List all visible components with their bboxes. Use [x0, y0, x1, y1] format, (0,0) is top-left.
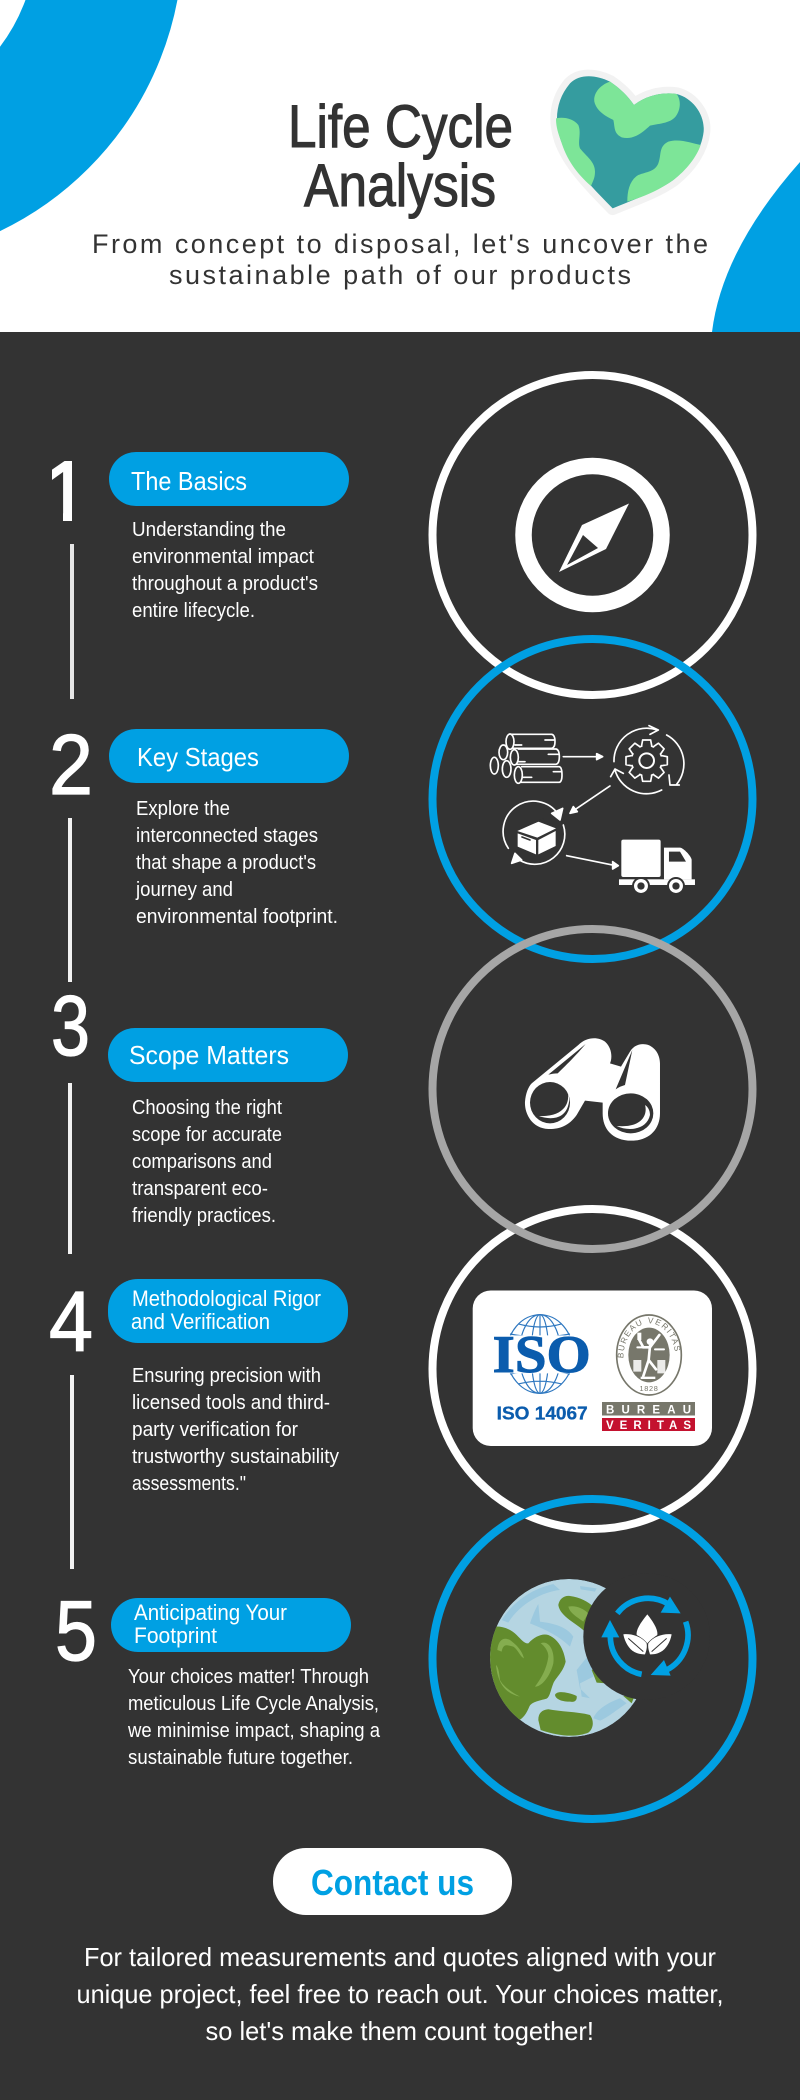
logo: Bureau Veritas: BUREAU [606, 1404, 691, 1416]
ring 1 [432, 375, 752, 695]
subtitle [92, 229, 708, 290]
text: step 3 description: friendly practices. [132, 1205, 276, 1227]
step 2 text group [49, 718, 349, 982]
icon: earth with recycling symbol [490, 1579, 691, 1737]
logo: ISO [493, 1315, 591, 1424]
subtitle: From concept to disposal, let's uncover the [92, 229, 708, 259]
text: step 2 description: Explore the [136, 798, 230, 820]
header panel [0, 0, 800, 332]
pill: Anticipating Your Footprint: Footprint [134, 1623, 217, 1648]
text: step 4 description: licensed tools and third- [132, 1392, 330, 1414]
decorative blue arc top left [0, 0, 110, 190]
pill: Key Stages: Key Stages [137, 742, 259, 772]
number 5: 5 [55, 1584, 97, 1679]
text: step 3 description: comparisons and [132, 1151, 272, 1173]
text: step 3 description: Choosing the right [132, 1097, 282, 1119]
text: step 2 description: that shape a product's [136, 852, 316, 874]
subtitle: sustainable path of our products [169, 260, 631, 290]
title: Life Cycle [288, 93, 513, 160]
pill: The Basics [109, 452, 349, 506]
text: step 2 description: journey and [135, 879, 233, 901]
arrow: logs to manufacturing [563, 754, 603, 760]
icon: recycling arrows [601, 1597, 688, 1676]
text: step 5 description: meticulous Life Cycle Analysis, [128, 1693, 379, 1715]
icon: logs [490, 734, 562, 783]
text: step 2 description: environmental footprint. [136, 906, 338, 928]
text: step 1 description: Understanding the [132, 519, 286, 541]
number 1: 1 [43, 445, 90, 540]
text: step 3 description: scope for accurate [132, 1124, 282, 1146]
closing text: unique project, feel free to reach out. Your choices matter, [76, 1979, 724, 2009]
text: step 3 description [132, 1097, 282, 1227]
text: step 2 description: interconnected stages [136, 825, 318, 847]
text: step 5 description: Your choices matter! Through [128, 1666, 369, 1688]
number 2: 2 [49, 718, 93, 813]
title [288, 93, 513, 219]
number 4: 4 [49, 1275, 93, 1370]
icon: binoculars [525, 1038, 660, 1141]
icon: truck [619, 840, 695, 895]
button: Contact us: Contact us [311, 1862, 474, 1903]
button: Contact us [273, 1848, 512, 1915]
text: step 5 description: we minimise impact, shaping a [127, 1720, 381, 1742]
pill: Methodological Rigor and Verification: and Verification [131, 1309, 270, 1334]
ring 2 [432, 639, 752, 959]
logo: Bureau Veritas: 1828 [640, 1384, 658, 1393]
ring 3 [432, 929, 752, 1249]
ring 5 [432, 1499, 752, 1819]
pill: Scope Matters: Scope Matters [129, 1040, 289, 1070]
pill: Methodological Rigor and Verification [108, 1279, 348, 1343]
title: Analysis [304, 152, 496, 219]
icon: leaves [623, 1614, 672, 1654]
ring 4 [432, 1209, 752, 1529]
logo: ISO: ISO [493, 1326, 591, 1384]
step 1 text group [43, 445, 349, 699]
connector line 1 [70, 544, 74, 699]
number 3: 3 [51, 979, 90, 1074]
pill: Scope Matters [108, 1028, 348, 1082]
closing text: so let's make them count together! [206, 2016, 594, 2046]
icon: earth heart [556, 76, 704, 208]
text: step 3 description: transparent eco- [132, 1178, 268, 1200]
pill: Anticipating Your Footprint [111, 1598, 351, 1652]
text: step 5 description: sustainable future together. [128, 1747, 353, 1769]
text: step 2 description [135, 798, 338, 928]
text: step 5 description [127, 1666, 381, 1769]
text: step 1 description: throughout a product's [132, 573, 318, 595]
step 3 text group [51, 979, 348, 1254]
step 4 text group [49, 1275, 348, 1569]
connector line 2 [68, 818, 72, 982]
text: step 4 description: assessments." [132, 1473, 246, 1495]
pill: Key Stages [109, 729, 349, 783]
text: step 4 description: trustworthy sustainability [132, 1446, 339, 1468]
text: step 4 description: Ensuring precision with [132, 1365, 321, 1387]
logo: Bureau Veritas: BUREAU VERITAS [618, 1317, 680, 1358]
closing text [76, 1942, 724, 2046]
logo: Bureau Veritas: VERITAS [606, 1420, 691, 1432]
card: certification logos [472, 1290, 712, 1446]
decorative blue arc right [712, 162, 800, 332]
arrow: packaging to transport [567, 856, 618, 869]
dark cut-out [583, 1573, 710, 1700]
text: step 1 description: entire lifecycle. [132, 600, 255, 622]
icon: compass [524, 466, 662, 604]
pill: The Basics: The Basics [131, 466, 247, 496]
icon: box with cycle arrows [503, 801, 565, 864]
connector line 4 [70, 1375, 74, 1569]
text: step 1 description: environmental impact [132, 546, 314, 568]
text: step 1 description [132, 519, 318, 622]
pill: Methodological Rigor and Verification: Methodological Rigor [132, 1286, 321, 1311]
pill: Anticipating Your Footprint: Anticipating Your [134, 1600, 287, 1625]
closing text: For tailored measurements and quotes aligned with your [84, 1942, 716, 1972]
step 5 text group [55, 1584, 381, 1769]
arrow: manufacturing to packaging [570, 786, 610, 813]
logo: ISO: ISO 14067 [497, 1404, 588, 1424]
text: step 4 description: party verification for [132, 1419, 298, 1441]
text: step 4 description [132, 1365, 339, 1495]
logo: Bureau Veritas [602, 1314, 695, 1432]
earth [490, 1579, 648, 1737]
icon: product journey diagram [490, 726, 695, 895]
icon: gear with cycle arrows [611, 726, 684, 794]
connector line 3 [68, 1083, 72, 1254]
